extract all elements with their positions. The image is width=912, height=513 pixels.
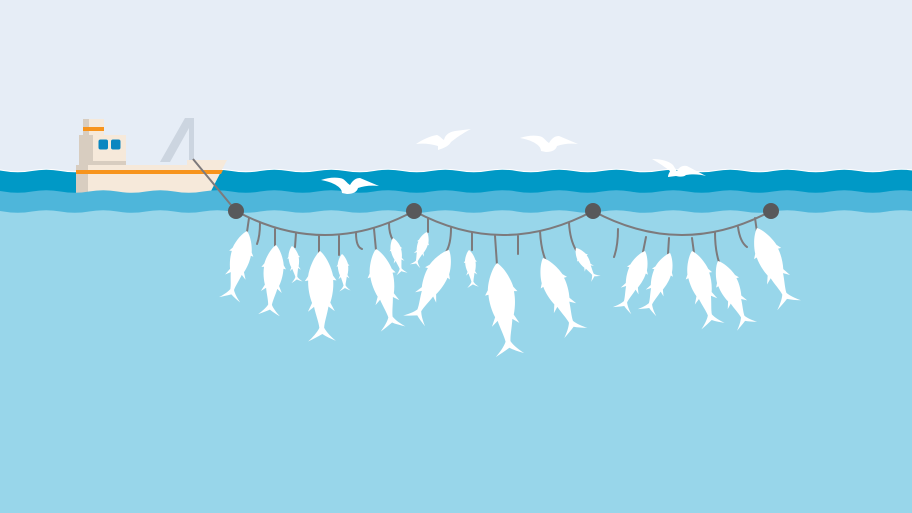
- hooked tuna: [218, 222, 803, 357]
- boat cabin: [79, 135, 126, 166]
- boat hull: [76, 160, 227, 193]
- fishing boat: [76, 118, 227, 193]
- seagull 1: [416, 129, 471, 150]
- tow line from boat: [193, 159, 236, 211]
- seagull 2: [520, 136, 578, 152]
- seagull 4: [652, 159, 706, 177]
- crane: [160, 118, 194, 162]
- seagull 3: [321, 178, 379, 194]
- boat upper mast: [83, 119, 104, 136]
- seagulls: [321, 129, 706, 194]
- floats: [228, 203, 779, 219]
- sea water: [0, 210, 912, 513]
- back wave band: [0, 169, 912, 200]
- longline with branch lines: [236, 211, 771, 265]
- middle wave band: [0, 190, 912, 220]
